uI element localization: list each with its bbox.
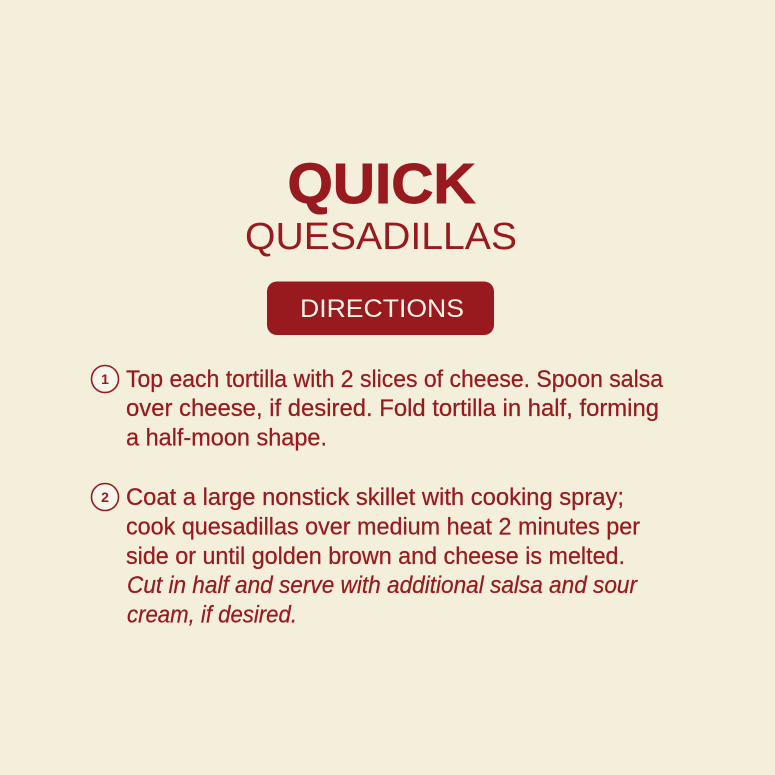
- step 2 text: Coat a large nonstick skillet with cooking spray;: [126, 484, 624, 511]
- step 1 text: [126, 366, 664, 452]
- step 1 text: over cheese, if desired. Fold tortilla in half, forming: [126, 395, 659, 422]
- icon: number 1: [92, 366, 118, 392]
- directions badge: DIRECTIONS: [300, 295, 464, 323]
- step 1: [92, 366, 664, 452]
- step 2: [92, 484, 640, 628]
- step 2 text: [126, 484, 640, 628]
- heading: quesadillas: QUESADILLAS: [245, 216, 517, 258]
- step 2 text: side or until golden brown and cheese is melted.: [126, 543, 625, 570]
- step 2 text: cook quesadillas over medium heat 2 minutes per: [126, 514, 640, 540]
- step 2 text: cream, if desired.: [127, 602, 297, 628]
- step 2 text: Cut in half and serve with additional salsa and sour: [127, 572, 638, 599]
- icon: number 2: 2: [101, 489, 109, 505]
- icon: number 2: [92, 484, 118, 510]
- heading: quick: QUICK: [288, 152, 476, 216]
- directions badge: [267, 282, 494, 335]
- icon: number 1: 1: [101, 371, 109, 387]
- title: [245, 152, 517, 258]
- step 1 text: Top each tortilla with 2 slices of cheese. Spoon salsa: [126, 366, 664, 393]
- step 1 text: a half-moon shape.: [126, 424, 327, 452]
